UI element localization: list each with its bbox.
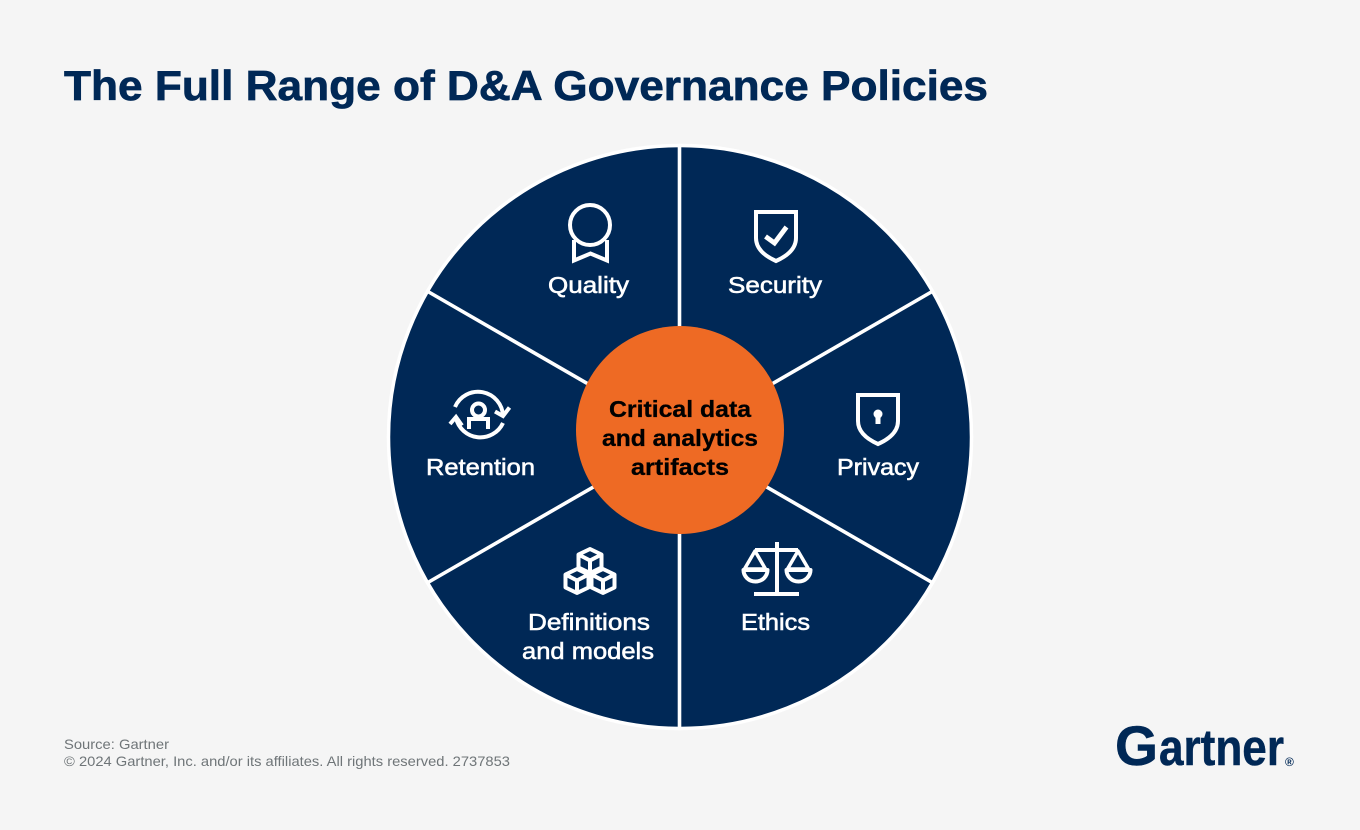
title: The Full Range of D&A Governance Policies [64,62,988,109]
segment: definitions and models [522,549,654,664]
gartner logo: artner [1159,719,1284,776]
gartner logo: ® [1285,755,1294,769]
icon: stacked cubes [566,549,614,593]
segment: retention [426,392,535,480]
label: definitions and models [522,609,654,664]
segment: privacy [837,395,920,480]
source and copyright: © 2024 Gartner, Inc. and/or its affiliates. All rights reserved. 2737853 [64,753,510,769]
source and copyright [64,736,510,769]
icon: balance scale [744,542,810,595]
hub text [602,396,758,480]
segment: quality [548,205,630,298]
label: definitions and models: and models [522,638,654,664]
label: ethics: Ethics [741,609,810,635]
gartner logo: G [1115,714,1158,777]
label: security: Security [728,272,823,298]
icon: shield with keyhole [858,395,898,444]
wheel chart [388,145,972,729]
icon: shield with check [756,212,796,261]
label: quality: Quality [548,272,630,298]
label: retention: Retention [426,454,535,480]
hub text: Critical data [609,396,751,422]
center hub [576,326,784,534]
label: privacy: Privacy [837,454,920,480]
icon: person with rotation arrows [450,392,510,437]
segment: security [728,212,823,298]
source and copyright: Source: Gartner [64,736,169,752]
hub text: artifacts [631,454,729,480]
label: definitions and models: Definitions [528,609,650,635]
hub text: and analytics [602,425,758,451]
icon: ribbon award [570,205,610,260]
gartner logo [1115,714,1294,777]
segment: ethics [741,542,810,635]
